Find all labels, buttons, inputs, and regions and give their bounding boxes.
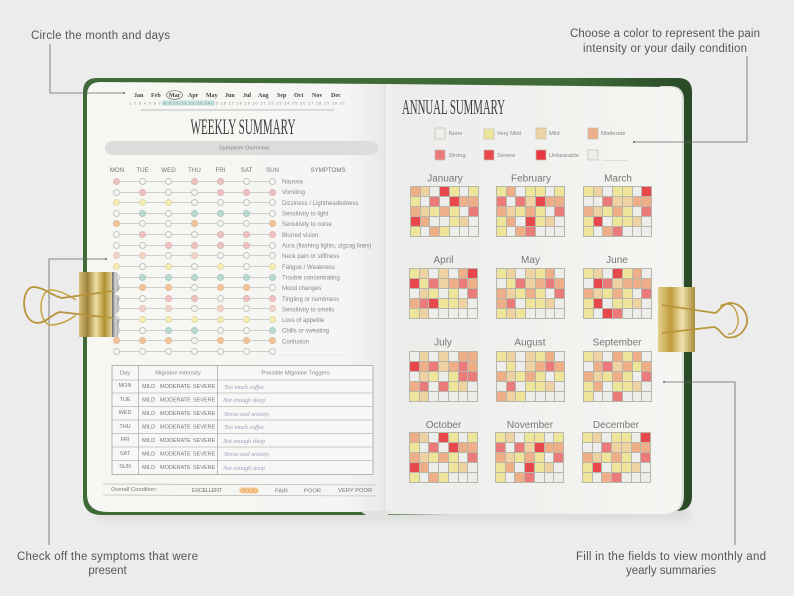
migraine table: MILD (142, 465, 155, 471)
month selector: May (206, 93, 218, 99)
migraine table: SEVERE (193, 452, 216, 458)
month selector: Jan (134, 93, 144, 99)
symptom labels: Sensitivity to light (282, 212, 329, 218)
day headers: TUE (136, 167, 149, 174)
month selector: Aug (258, 93, 269, 99)
july grid (409, 351, 478, 402)
pain legend: Moderate (601, 131, 626, 137)
migraine table: MODERATE (160, 384, 191, 390)
migraine table: MODERATE (160, 398, 191, 404)
december grid (582, 432, 651, 483)
symptom labels: Nausea (282, 180, 303, 186)
migraine table: FRI (121, 437, 130, 443)
month selector: Sep (277, 93, 287, 99)
cover (83, 78, 692, 520)
month names: March (604, 174, 632, 184)
month selector: Jun (225, 93, 235, 99)
title: weekly summary: WEEKLY SUMMARY (190, 114, 296, 139)
month names: February (511, 174, 551, 184)
migraine table: Stress and anxiety (224, 411, 269, 418)
note: check off symptoms: Check off the symptoms that were (17, 551, 198, 563)
month names: November (507, 420, 554, 431)
migraine table: MODERATE (160, 411, 191, 417)
overall condition: EXCELLENT (192, 488, 222, 494)
note: check off symptoms (17, 551, 198, 577)
overall condition: FAIR (275, 488, 288, 494)
month names: December (593, 420, 640, 431)
pain legend: Mild (549, 131, 560, 137)
october grid (409, 432, 478, 483)
january grid (410, 186, 479, 237)
september grid (583, 351, 652, 402)
migraine table: MILD (142, 424, 155, 430)
leader: calendar fields (663, 381, 735, 545)
month selector: Apr (188, 93, 199, 99)
migraine table: Migraine Intensity (155, 370, 201, 376)
overall condition: Overall Condition: (111, 487, 157, 493)
migraine table: SUN (119, 464, 131, 470)
month names: January (427, 174, 463, 184)
migraine table: MODERATE (160, 465, 191, 471)
migraine table: Too much coffee (224, 384, 264, 391)
day headers: THU (188, 167, 201, 174)
month selector: Jul (243, 93, 251, 99)
month selector: Dec (331, 93, 341, 99)
overall condition: GOOD (241, 488, 257, 494)
day headers: SUN (266, 167, 279, 174)
symptom labels: Trouble concentrating (282, 276, 340, 282)
overall condition (103, 484, 376, 496)
month names: June (606, 255, 628, 266)
november grid (495, 432, 564, 483)
symptom labels: Dizziness / Lightheadedness (282, 201, 358, 207)
migraine table: MILD (142, 452, 155, 458)
symptom labels: Chills or sweating (282, 329, 329, 335)
migraine table: MODERATE (160, 452, 191, 458)
month selector: 1 2 3 4 5 6 7 8 9 10 11 12 13 14 15 16 17 18 19 20 21 22 23 24 25 26 27 28 29 30 31 (129, 102, 345, 106)
pain legend: None (448, 131, 462, 137)
symptom labels: Aura (flashing lights, zigzag lines) (282, 244, 371, 250)
note: check off symptoms: present (88, 565, 127, 577)
august grid (496, 351, 565, 402)
migraine table: Not enough sleep (222, 438, 266, 445)
migraine table: MILD (142, 384, 155, 390)
migraine table: MILD (142, 398, 155, 404)
migraine table: Stress and anxiety (224, 451, 269, 458)
symptom labels: Blurred vision (282, 233, 318, 239)
symptom overview bar: Symptom Overview (219, 146, 270, 152)
migraine table: SEVERE (193, 465, 216, 471)
month names: July (434, 338, 452, 348)
note: fill in fields: yearly summaries (626, 565, 716, 577)
day headers: MON (110, 167, 124, 174)
pain legend: Severe (497, 153, 515, 159)
month names: October (426, 420, 462, 431)
symptom labels: Vomiting (282, 190, 305, 196)
april grid (409, 268, 478, 319)
migraine table: SAT (120, 451, 131, 457)
note: choose a color (570, 28, 760, 55)
migraine table: SEVERE (193, 424, 216, 430)
overall condition: POOR (304, 488, 321, 494)
day headers: WED (161, 167, 176, 174)
left page (87, 82, 390, 512)
migraine table: MILD (142, 411, 155, 417)
symptom labels: Sensitivity to smells (282, 307, 334, 313)
migraine table: Day (120, 370, 130, 376)
leader: symptom check (49, 258, 107, 545)
right page (386, 84, 682, 514)
month names: April (433, 255, 454, 266)
migraine table: WED (119, 410, 131, 416)
migraine table: TUE (120, 397, 131, 403)
title: annual summary: ANNUAL SUMMARY (402, 95, 505, 119)
june grid (583, 268, 652, 319)
migraine table: MODERATE (160, 424, 191, 430)
migraine table: Not enough sleep (222, 397, 266, 404)
migraine table: THU (119, 424, 131, 430)
symptom labels: Fatigue / Weakness (282, 265, 335, 271)
migraine table: SEVERE (193, 411, 216, 417)
symptom overview bar (105, 141, 378, 155)
symptom labels: Sensitivity to noise (282, 222, 332, 228)
migraine table: Possible Migraine Triggers (261, 370, 330, 376)
note: fill in fields: Fill in the fields to view monthly and (576, 551, 766, 563)
leader: colour legend (633, 56, 747, 143)
month names: September (593, 338, 642, 348)
day headers: SYMPTOMS (310, 167, 346, 174)
march grid (583, 186, 652, 237)
symptom labels: Mood changes (282, 286, 321, 292)
month selector: Oct (294, 93, 303, 99)
month selector (129, 91, 345, 110)
migraine table: MILD (142, 438, 155, 444)
left binder clip (24, 272, 119, 337)
note: fill in fields (576, 551, 766, 577)
may grid (496, 268, 565, 319)
pain legend (435, 128, 628, 160)
symptom labels: Confusion (282, 339, 309, 345)
pain legend: Unbearable (549, 153, 579, 159)
migraine table: Not enough sleep (222, 465, 266, 472)
pain legend: Very Mild (497, 131, 521, 137)
migraine table: MODERATE (160, 438, 191, 444)
symptom labels: Neck pain or stiffness (282, 254, 339, 260)
overall condition: VERY POOR (338, 488, 372, 494)
note: circle the month: Circle the month and days (31, 30, 170, 42)
note: choose a color: intensity or your daily condition (583, 43, 747, 55)
month names: May (521, 255, 540, 266)
symptom labels: Tingling or numbness (282, 297, 339, 303)
day headers: SAT (241, 167, 253, 174)
migraine table: SEVERE (193, 384, 216, 390)
right binder clip (658, 287, 747, 352)
symptom labels: Loss of appetite (282, 318, 325, 324)
migraine table: Too much coffee (224, 424, 264, 431)
migraine table (112, 366, 373, 474)
leader: month selector (50, 44, 125, 94)
month selector: Mar (169, 93, 181, 99)
page curl (360, 511, 390, 522)
migraine table: MON (119, 383, 131, 389)
day headers: FRI (216, 167, 226, 174)
migraine table: SEVERE (193, 438, 216, 444)
note: choose a color: Choose a color to represent the pain (570, 28, 760, 40)
pain legend: Strong (448, 153, 466, 159)
page stack edge (660, 86, 684, 513)
symptom labels (280, 180, 371, 355)
month names (426, 174, 642, 431)
month selector: Nov (312, 93, 322, 99)
migraine table: SEVERE (193, 398, 216, 404)
february grid (496, 186, 565, 237)
month selector: Feb (151, 93, 161, 99)
day headers (110, 167, 346, 174)
month names: August (514, 338, 546, 348)
